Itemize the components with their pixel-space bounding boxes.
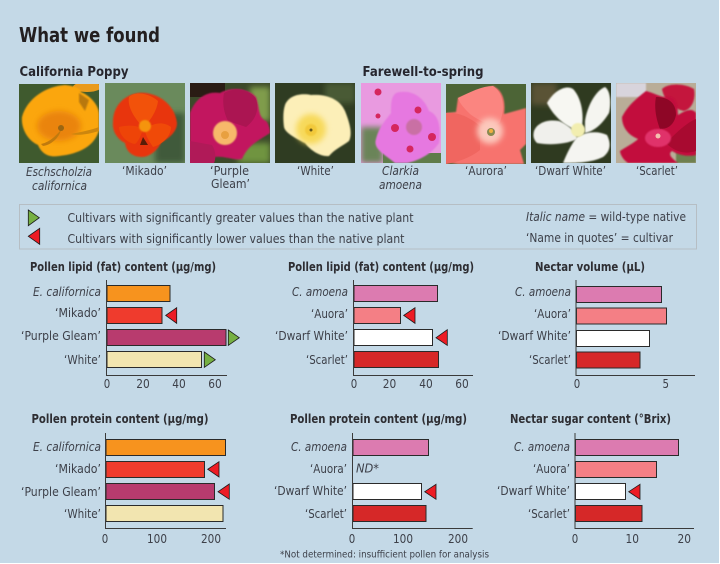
- chart: nectar volume: 0: [574, 377, 580, 391]
- chart: pollen protein, Farewell-to-spring: ‘Dwarf White’: [274, 484, 347, 498]
- icon: green triangle: [28, 210, 39, 226]
- heading: California Poppy: California Poppy: [20, 65, 129, 80]
- chart: nectar sugar content: ‘Dwarf White’: [497, 484, 570, 498]
- chart: pollen protein, California Poppy: 200: [201, 532, 221, 546]
- chart: nectar sugar content: [497, 412, 694, 546]
- chart: pollen lipid, Farewell-to-spring: 20: [383, 377, 396, 391]
- chart: pollen lipid, Farewell-to-spring: 0: [351, 377, 357, 391]
- chart: pollen lipid, Farewell-to-spring: 40: [419, 377, 433, 391]
- photo: White: [275, 83, 355, 163]
- chart: pollen lipid, Farewell-to-spring: ‘Auora’: [311, 307, 348, 321]
- chart: pollen lipid, California Poppy: [21, 260, 239, 391]
- chart: pollen lipid, Farewell-to-spring: Pollen lipid (fat) content (µg/mg): [288, 260, 474, 274]
- chart: nectar sugar content: 20: [678, 532, 691, 546]
- chart: nectar sugar content: ‘Scarlet’: [528, 507, 570, 521]
- chart: nectar sugar content: 0: [572, 532, 578, 546]
- photo: Scarlet: [616, 83, 696, 163]
- chart: pollen protein, Farewell-to-spring: C. amoena: [291, 440, 347, 454]
- caption: Scarlet: ‘Scarlet’: [636, 164, 678, 178]
- chart: pollen lipid, California Poppy: ‘Mikado’: [55, 306, 101, 320]
- chart: nectar volume: ‘Auora’: [534, 307, 571, 321]
- chart: pollen lipid, Farewell-to-spring: ‘Dwarf White’: [275, 329, 348, 343]
- legend text: name in quotes: ‘Name in quotes’ = cultivar: [526, 231, 673, 245]
- photo: Clarkia amoena: [361, 83, 441, 163]
- chart: pollen protein, California Poppy: 100: [147, 532, 167, 546]
- photo: Eschscholzia californica: [19, 84, 99, 163]
- caption: Aurora: ‘Aurora’: [465, 164, 507, 178]
- chart: nectar sugar content: 10: [626, 532, 639, 546]
- chart: pollen lipid, California Poppy: 0: [104, 377, 110, 391]
- chart: nectar volume: 5: [662, 377, 669, 391]
- title: What we found: [19, 23, 160, 47]
- chart: nectar volume: [498, 260, 695, 391]
- photo: Dwarf White: [531, 83, 611, 163]
- chart: nectar volume: ‘Scarlet’: [529, 353, 571, 367]
- chart: pollen protein, California Poppy: 0: [102, 532, 108, 546]
- chart: pollen protein, California Poppy: E. californica: [33, 440, 101, 454]
- chart: pollen protein, California Poppy: ‘White’: [64, 507, 101, 521]
- chart: pollen lipid, California Poppy: Pollen lipid (fat) content (µg/mg): [30, 260, 216, 274]
- chart: pollen protein, California Poppy: ‘Mikado’: [55, 462, 101, 476]
- footnote: *Not determined: insufficient pollen for analysis: [280, 550, 489, 560]
- caption: Dwarf White: ‘Dwarf White’: [535, 164, 606, 178]
- chart: pollen lipid, California Poppy: 40: [172, 377, 186, 391]
- caption: Mikado: ‘Mikado’: [122, 164, 167, 178]
- chart: pollen protein, Farewell-to-spring: 100: [393, 532, 413, 546]
- legend text: italic name: Italic name = wild-type native: [526, 210, 686, 224]
- chart: pollen protein, Farewell-to-spring: ‘Scarlet’: [305, 507, 347, 521]
- chart: pollen protein, Farewell-to-spring: ‘Auora’: [310, 462, 347, 476]
- chart: pollen lipid, Farewell-to-spring: ‘Scarlet’: [306, 353, 348, 367]
- caption: Eschscholzia californica: [26, 165, 92, 193]
- chart: pollen lipid, Farewell-to-spring: C. amoena: [292, 285, 348, 299]
- heading: Farewell-to-spring: Farewell-to-spring: [362, 65, 484, 80]
- chart: pollen protein, Farewell-to-spring: 0: [349, 532, 355, 546]
- chart: pollen protein, California Poppy: Pollen protein content (µg/mg): [32, 412, 208, 426]
- chart: pollen lipid, Farewell-to-spring: 60: [455, 377, 469, 391]
- chart: nectar sugar content: ‘Auora’: [533, 462, 570, 476]
- caption: Eschscholzia californica: californica: [32, 179, 87, 193]
- legend panel: [20, 204, 696, 249]
- caption: Clarkia amoena: amoena: [379, 178, 422, 192]
- chart: pollen lipid, California Poppy: ‘Purple Gleam’: [21, 329, 101, 343]
- chart: nectar sugar content: Nectar sugar content (°Brix): [510, 412, 671, 426]
- chart: pollen lipid, California Poppy: 20: [136, 377, 150, 391]
- caption: Purple Gleam: Gleam’: [211, 177, 250, 191]
- chart: pollen protein, Farewell-to-spring: Pollen protein content (µg/mg): [290, 412, 467, 426]
- photo: Purple Gleam: [190, 83, 270, 163]
- chart: pollen lipid, California Poppy: E. californica: [33, 285, 101, 299]
- legend text: greater: Cultivars with significantly greater values than the native plant: [68, 211, 414, 225]
- caption: Purple Gleam: [210, 164, 250, 191]
- chart: nectar volume: Nectar volume (µL): [535, 260, 645, 274]
- caption: Clarkia amoena: [379, 164, 422, 192]
- chart: pollen protein, Farewell-to-spring: 200: [448, 532, 468, 546]
- caption: Eschscholzia californica: Eschscholzia: [26, 165, 92, 179]
- chart: pollen lipid, California Poppy: 60: [208, 377, 222, 391]
- chart: nectar volume: C. amoena: [515, 285, 571, 299]
- chart: pollen protein, Farewell-to-spring: [274, 412, 473, 546]
- chart: nectar sugar content: C. amoena: [514, 440, 570, 454]
- chart: pollen lipid, Farewell-to-spring: [275, 260, 474, 391]
- chart: nectar volume: ‘Dwarf White’: [498, 329, 571, 343]
- photo: Aurora: [446, 84, 526, 164]
- chart: pollen protein, California Poppy: ‘Purple Gleam’: [21, 485, 101, 499]
- caption: Clarkia amoena: Clarkia: [382, 164, 419, 178]
- chart: pollen lipid, California Poppy: ‘White’: [64, 353, 101, 367]
- legend text: lower: Cultivars with significantly lower values than the native plant: [68, 232, 405, 246]
- icon: red triangle: [28, 228, 40, 244]
- caption: White: ‘White’: [297, 164, 334, 178]
- chart: pollen protein, California Poppy: [21, 412, 229, 546]
- photo: Mikado: [105, 83, 185, 163]
- chart: pollen protein, Farewell-to-spring: ND*: [356, 462, 379, 476]
- caption: Purple Gleam: ‘Purple: [210, 164, 249, 178]
